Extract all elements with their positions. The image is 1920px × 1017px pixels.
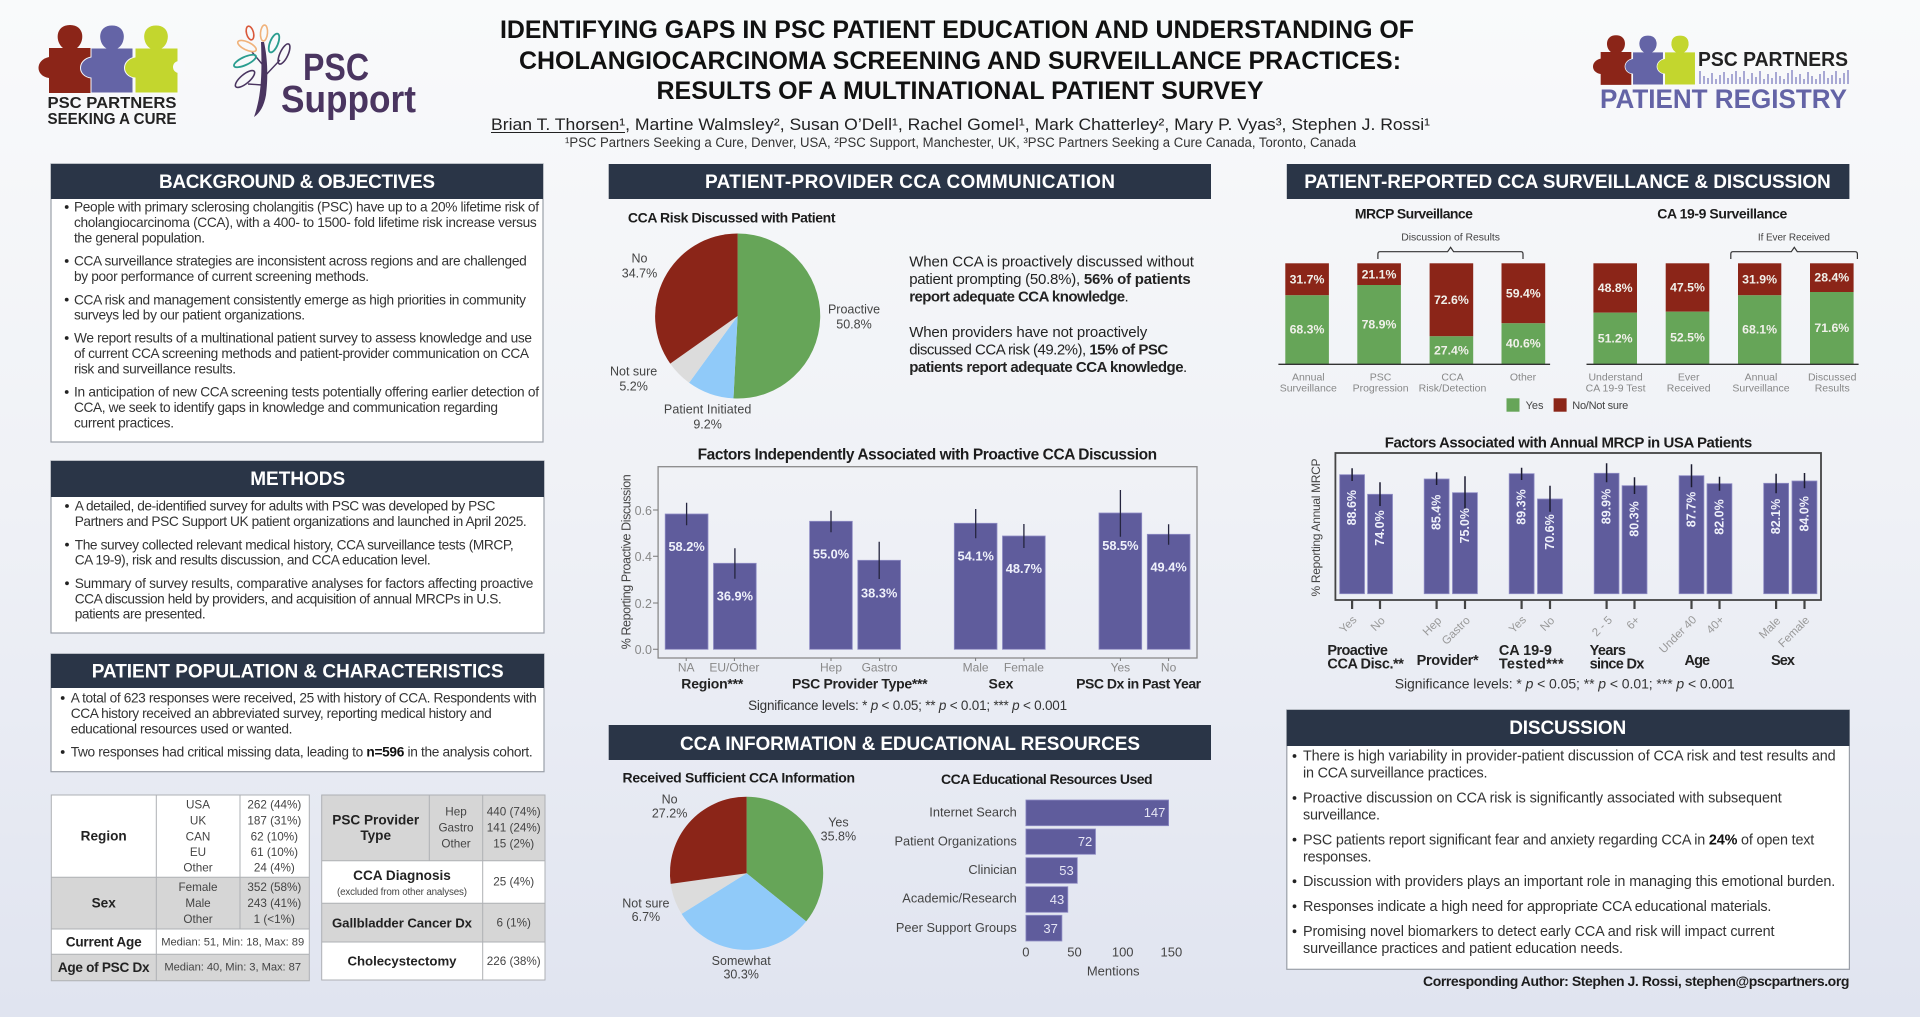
stacked bars: CA 19-9 surveillance: Discussed — [1808, 372, 1857, 384]
stacked bars: MRCP surveillance: Discussion of Results — [1401, 233, 1500, 244]
stacked bars: CA 19-9 surveillance: Ever — [1678, 372, 1700, 384]
table: demographics: EU — [190, 846, 206, 859]
logo: PSC Partners Patient Registry: PATIENT REGISTRY — [1600, 84, 1847, 114]
bullet text: patient population — [61, 691, 537, 760]
bar chart: factors associated with annual MRCP in USA patients: 6+ — [1625, 614, 1643, 632]
bullet text: methods: A detailed, de-identified survey for adults with PSC was developed by PSC — [75, 499, 496, 514]
pie chart: received sufficient CCA information — [622, 769, 856, 982]
bar chart: factors associated with proactive CCA discussion: PSC Provider Type*** — [792, 675, 928, 691]
bullet text: patient population: A total of 623 responses were received, 25 with history of CCA. Respondents with — [71, 691, 537, 706]
table: demographics: Median: 51, Min: 18, Max: 89 — [161, 936, 304, 948]
table: clinical characteristics: Other — [441, 837, 471, 850]
stacked bars: CA 19-9 surveillance — [1586, 205, 1859, 395]
bar chart: CCA educational resources used: Clinician — [968, 862, 1017, 877]
title: CHOLANGIOCARCINOMA SCREENING AND SURVEILLANCE PRACTICES: — [519, 47, 1401, 75]
pie chart: CCA risk discussed with patient: 9.2% — [693, 418, 722, 432]
table: clinical characteristics: Type — [360, 828, 391, 843]
bullet text: methods — [65, 499, 533, 621]
table: demographics: 243 (41%) — [247, 897, 301, 910]
stacked bars: CA 19-9 surveillance: 71.6% — [1814, 321, 1849, 335]
bar chart: factors associated with proactive CCA discussion: 0.2 — [635, 597, 652, 611]
stacked bars: CA 19-9 surveillance: 52.5% — [1670, 331, 1705, 345]
bar chart: CCA educational resources used — [894, 771, 1182, 979]
bullet text: methods: Summary of survey results, comparative analyses for factors affecting proactive — [75, 576, 533, 591]
bullet text: methods: The survey collected relevant medical history, CCA surveillance tests (MRCP, — [75, 537, 514, 552]
bar chart: factors associated with annual MRCP in USA patients: 75.0% — [1458, 508, 1472, 543]
table: demographics: 1 (<1%) — [254, 913, 295, 926]
callout: CCA knowledge findings: report adequate CCA knowledge. — [909, 289, 1129, 306]
table: demographics: Age of PSC Dx — [58, 960, 150, 975]
heading: discussion — [1287, 710, 1849, 746]
bar chart: factors associated with proactive CCA discussion: Yes — [1111, 661, 1130, 675]
bullet text: discussion: Proactive discussion on CCA risk is significantly associated with subsequent — [1303, 791, 1782, 807]
bullet text: background: of current CCA screening methods and patient-provider communication on CCA — [74, 346, 530, 361]
bullet text: background: risk and surveillance results. — [74, 361, 236, 376]
table: demographics: USA — [186, 798, 210, 811]
table: demographics: 61 (10%) — [251, 846, 298, 859]
stacked bars: MRCP surveillance: MRCP Surveillance — [1355, 205, 1473, 221]
panel: background and objectives — [51, 164, 543, 442]
pie chart: CCA risk discussed with patient — [610, 210, 880, 432]
stacked bars: MRCP surveillance: 40.6% — [1506, 337, 1541, 351]
pie chart: CCA risk discussed with patient: Patient Initiated — [664, 402, 751, 416]
bar chart: CCA educational resources used: 37 — [1043, 921, 1058, 936]
stacked bars: CA 19-9 surveillance: 47.5% — [1670, 280, 1705, 294]
bar chart: factors associated with annual MRCP in USA patients: 85.4% — [1430, 495, 1444, 530]
legend: yes / no or not sure: No/Not sure — [1572, 400, 1628, 412]
table: demographics: Other — [183, 862, 213, 875]
bar chart: factors associated with annual MRCP in USA patients: Provider* — [1417, 653, 1479, 669]
bar chart: factors associated with annual MRCP in USA patients: Years — [1590, 643, 1626, 659]
table: demographics: 62 (10%) — [251, 830, 298, 843]
heading: patient population — [51, 654, 544, 688]
heading: background and objectives — [51, 164, 543, 199]
bar chart: factors associated with proactive CCA discussion: 58.5% — [1102, 538, 1139, 553]
table: demographics: 262 (44%) — [247, 798, 301, 811]
bar chart: factors associated with proactive CCA discussion: Significance levels: * p < 0.05; ** p < 0.01; *** p < 0.001 — [748, 698, 1067, 713]
logo: PSC Support: PSC — [303, 47, 369, 89]
table: demographics: Region — [81, 829, 127, 844]
bar chart: CCA educational resources used: 50 — [1067, 945, 1082, 960]
pie chart: received sufficient CCA information: No — [662, 793, 678, 807]
table: clinical characteristics: Gastro — [438, 821, 474, 834]
heading: patient-reported CCA surveillance and discussion — [1287, 164, 1849, 199]
panel: methods: METHODS — [250, 469, 345, 490]
pie chart: received sufficient CCA information: 27.2% — [652, 806, 687, 820]
bar chart: factors associated with proactive CCA discussion: 54.1% — [958, 548, 994, 563]
stacked bars: CA 19-9 surveillance: 31.9% — [1742, 272, 1777, 286]
table: clinical characteristics: 6 (1%) — [496, 917, 531, 930]
authors: Brian T. Thorsen¹, Martine Walmsley², Susan O’Dell¹, Rachel Gomel¹, Mark Chatterley², Mary P. Vyas³, Stephen J. Rossi¹ — [491, 116, 1431, 134]
title — [500, 16, 1414, 105]
bar chart: CCA educational resources used: Patient Organizations — [894, 833, 1017, 848]
bar chart: CCA educational resources used: Internet Search — [929, 804, 1017, 819]
bullet text: methods: Partners and PSC Support UK patient organizations and launched in April 2025. — [75, 514, 527, 529]
bar chart: factors associated with proactive CCA discussion: Region*** — [681, 675, 744, 691]
callout: CCA knowledge findings: patient prompting (50.8%), 56% of patients — [909, 271, 1191, 288]
table: demographics: UK — [190, 814, 206, 827]
stacked bars: CA 19-9 surveillance: Understand — [1588, 372, 1643, 384]
pie chart: CCA risk discussed with patient: CCA Risk Discussed with Patient — [628, 210, 836, 226]
table: clinical characteristics: 226 (38%) — [487, 955, 541, 968]
bar chart: factors associated with proactive CCA discussion — [620, 446, 1202, 713]
pie chart: CCA risk discussed with patient: 5.2% — [619, 379, 648, 393]
heading: CCA information and educational resources: CCA INFORMATION & EDUCATIONAL RESOURCES — [680, 734, 1140, 755]
bar chart: factors associated with annual MRCP in USA patients: 82.1% — [1769, 499, 1783, 534]
bar chart: factors associated with annual MRCP in USA patients: Male — [1757, 615, 1783, 641]
stacked bars: MRCP surveillance: 59.4% — [1506, 287, 1541, 301]
table: clinical characteristics: Gallbladder Cancer Dx — [332, 915, 473, 930]
pie chart: received sufficient CCA information: 35.8% — [821, 830, 856, 844]
bullet text: background: CCA risk and management consistently emerge as high priorities in community — [74, 292, 526, 307]
bullet text: discussion: in CCA surveillance practices. — [1303, 766, 1488, 782]
pie chart: received sufficient CCA information: Received Sufficient CCA Information — [623, 769, 855, 785]
stacked bars: MRCP surveillance: Other — [1510, 372, 1537, 384]
bar chart: factors associated with annual MRCP in USA patients: 82.0% — [1712, 499, 1726, 535]
pie chart: received sufficient CCA information: Yes — [828, 816, 849, 830]
panel: background and objectives: BACKGROUND & OBJECTIVES — [159, 172, 435, 193]
bar chart: factors associated with proactive CCA discussion: Gastro — [862, 661, 898, 675]
pie chart: received sufficient CCA information: 6.7% — [632, 910, 660, 924]
heading: patient-provider CCA communication — [609, 164, 1211, 199]
bar chart: factors associated with proactive CCA discussion: PSC Dx in Past Year — [1076, 675, 1202, 691]
stacked bars: CA 19-9 surveillance: Received — [1667, 383, 1711, 395]
affiliations: ¹PSC Partners Seeking a Cure, Denver, USA, ²PSC Support, Manchester, UK, ³PSC Partners Seeking a Cure Canada, Toronto, Canada — [565, 135, 1356, 150]
bullet text: methods: patients are presented. — [75, 606, 206, 621]
stacked bars: CA 19-9 surveillance: 68.1% — [1742, 323, 1777, 337]
table: clinical characteristics: 15 (2%) — [493, 837, 534, 850]
bullet text: background: We report results of a multinational patient survey to assess knowledge and use — [74, 331, 532, 346]
bullet text: discussion — [1293, 749, 1836, 957]
table: clinical characteristics — [322, 795, 545, 980]
bar chart: factors associated with annual MRCP in USA patients: Yes — [1338, 614, 1360, 636]
logo: PSC Partners Seeking a Cure: PSC PARTNERS — [48, 95, 176, 112]
logo: PSC Partners Seeking a Cure: SEEKING A CURE — [48, 111, 176, 128]
bar chart: factors associated with annual MRCP in USA patients: Sex — [1771, 653, 1795, 669]
heading: patient-reported CCA surveillance and discussion: PATIENT-REPORTED CCA SURVEILLANCE & DISCUSSION — [1304, 172, 1831, 193]
stacked bars: CA 19-9 surveillance: 28.4% — [1814, 271, 1849, 285]
bar chart: factors associated with annual MRCP in USA patients: No — [1369, 615, 1388, 634]
table: demographics: Female — [179, 881, 217, 894]
heading: patient-provider CCA communication: PATIENT-PROVIDER CCA COMMUNICATION — [705, 172, 1115, 193]
bullet text: discussion: There is high variability in provider-patient discussion of CCA risk and test results and — [1303, 749, 1836, 765]
table: clinical characteristics: Cholecystectomy — [348, 954, 457, 969]
table: demographics: 352 (58%) — [247, 881, 301, 894]
table: clinical characteristics: 141 (24%) — [487, 821, 541, 834]
logo: PSC Partners Patient Registry: PSC PARTNERS — [1698, 49, 1848, 71]
table: demographics: 24 (4%) — [254, 862, 295, 875]
bullet text: background: CCA, we seek to identify gaps in knowledge and communication regarding — [74, 400, 498, 415]
bar chart: CCA educational resources used: Mentions — [1087, 964, 1140, 979]
bar chart: factors associated with proactive CCA discussion: 36.9% — [717, 589, 754, 604]
bullet text: discussion: responses. — [1303, 849, 1372, 865]
stacked bars: MRCP surveillance: 78.9% — [1362, 317, 1396, 331]
panel: patient population and characteristics — [51, 654, 544, 772]
table: demographics — [51, 795, 309, 981]
stacked bars: CA 19-9 surveillance: Results — [1815, 383, 1850, 395]
logo: PSC Partners Patient Registry — [1593, 35, 1848, 114]
stacked bars: MRCP surveillance: Risk/Detection — [1419, 383, 1486, 395]
callout: CCA knowledge findings: When CCA is proactively discussed without — [909, 253, 1195, 270]
stacked bars: CA 19-9 surveillance: If Ever Received — [1758, 233, 1830, 244]
bar chart: factors associated with annual MRCP in USA patients: 89.9% — [1600, 489, 1614, 524]
corresponding author: Corresponding Author: Stephen J. Rossi, stephen@pscpartners.org — [1423, 973, 1849, 989]
bar chart: CCA educational resources used: 0 — [1022, 945, 1030, 960]
bar chart: factors associated with proactive CCA discussion: % Reporting Proactive Discussion — [620, 474, 634, 649]
callout: CCA knowledge findings — [909, 253, 1195, 376]
pie chart: received sufficient CCA information: Somewhat — [712, 954, 771, 968]
bar chart: factors associated with annual MRCP in USA patients: Hep — [1421, 615, 1444, 638]
stacked bars: CA 19-9 surveillance: Annual — [1745, 372, 1777, 384]
callout: CCA knowledge findings: When providers have not proactively — [909, 324, 1148, 341]
bullet text: discussion: surveillance. — [1303, 807, 1380, 823]
bullet text: discussion: Promising novel biomarkers to detect early CCA and risk will impact current — [1303, 924, 1774, 940]
bar chart: factors associated with proactive CCA discussion: Female — [1004, 661, 1044, 675]
panel: discussion — [1287, 710, 1849, 969]
bullet text: background: CCA surveillance strategies are inconsistent across regions and are challenged — [74, 254, 527, 269]
stacked bars: MRCP surveillance: Annual — [1292, 372, 1325, 384]
table: demographics: 187 (31%) — [247, 814, 301, 827]
bar chart: factors associated with annual MRCP in USA patients: 74.0% — [1373, 510, 1387, 546]
heading: methods — [51, 461, 544, 497]
heading: CCA information and educational resources — [609, 725, 1211, 760]
bar chart: CCA educational resources used: 43 — [1050, 892, 1064, 907]
bar chart: factors associated with annual MRCP in USA patients — [1309, 434, 1821, 691]
stacked bars: MRCP surveillance — [1278, 205, 1550, 395]
bar chart: factors associated with proactive CCA discussion: 38.3% — [861, 585, 898, 600]
bullet text: background: In anticipation of new CCA screening tests potentially offering earlier detection of — [74, 385, 539, 400]
table: demographics: Male — [185, 897, 211, 910]
bar chart: factors associated with annual MRCP in USA patients: Proactive — [1327, 643, 1388, 659]
bar chart: factors associated with proactive CCA discussion: 58.2% — [668, 539, 705, 554]
bar chart: factors associated with annual MRCP in USA patients: 2 - 5 — [1590, 614, 1615, 639]
table: clinical characteristics: 25 (4%) — [493, 876, 534, 889]
bar chart: factors associated with annual MRCP in USA patients: 70.6% — [1543, 514, 1557, 550]
stacked bars: MRCP surveillance: 31.7% — [1290, 273, 1324, 287]
stacked bars: MRCP surveillance: 27.4% — [1434, 344, 1469, 358]
bullet text: background: surveys led by our patient organizations. — [74, 308, 305, 323]
bar chart: factors associated with proactive CCA discussion: Male — [963, 661, 989, 675]
bar chart: CCA educational resources used: 100 — [1112, 945, 1134, 960]
pie chart: CCA risk discussed with patient: 50.8% — [836, 317, 872, 331]
bar chart: factors associated with proactive CCA discussion: EU/Other — [709, 661, 759, 675]
bar chart: CCA educational resources used: 72 — [1078, 834, 1092, 849]
bar chart: factors associated with annual MRCP in USA patients: Age — [1684, 653, 1710, 669]
legend: yes / no or not sure: Yes — [1526, 400, 1544, 412]
bullet text: background: by poor performance of current screening methods. — [74, 269, 369, 284]
bar chart: CCA educational resources used: 147 — [1144, 805, 1165, 820]
bullet text: background: cholangiocarcinoma (CCA), with a 400- to 1500- fold lifetime risk increase versus — [74, 215, 537, 230]
bar chart: CCA educational resources used: 53 — [1059, 863, 1074, 878]
stacked bars: CA 19-9 surveillance: 51.2% — [1598, 331, 1633, 345]
bar chart: factors associated with annual MRCP in USA patients: Female — [1776, 614, 1812, 650]
bar chart: factors associated with annual MRCP in USA patients: Tested*** — [1499, 656, 1564, 672]
stacked bars: MRCP surveillance: 68.3% — [1290, 323, 1324, 337]
callout: CCA knowledge findings: patients report adequate CCA knowledge. — [909, 359, 1187, 376]
table: clinical characteristics: CCA Diagnosis — [353, 868, 451, 883]
bullet text: discussion: Discussion with providers plays an important role in managing this emotional burden. — [1303, 874, 1835, 890]
bullet text: discussion: Responses indicate a high need for appropriate CCA educational materials. — [1303, 899, 1771, 915]
stacked bars: CA 19-9 surveillance: Surveillance — [1732, 383, 1790, 395]
stacked bars: MRCP surveillance: 72.6% — [1434, 293, 1469, 307]
table: demographics: Median: 40, Min: 3, Max: 87 — [164, 962, 301, 974]
bar chart: factors associated with annual MRCP in USA patients: 80.3% — [1628, 501, 1642, 537]
bar chart: factors associated with proactive CCA discussion: NA — [678, 661, 695, 675]
pie chart: CCA risk discussed with patient: No — [632, 251, 648, 265]
table: clinical characteristics: Hep — [445, 805, 467, 818]
bullet text: methods: CA 19-9), risk and results discussion, and CCA education level. — [75, 553, 431, 568]
bullet text: background — [65, 200, 539, 430]
bar chart: CCA educational resources used: 150 — [1161, 945, 1182, 960]
table: clinical characteristics: 440 (74%) — [487, 805, 541, 818]
pie chart: received sufficient CCA information: 30.3% — [723, 968, 759, 982]
bar chart: factors associated with annual MRCP in USA patients: 40+ — [1705, 614, 1727, 636]
legend: yes / no or not sure — [1506, 398, 1628, 412]
table: clinical characteristics: (excluded from other analyses) — [337, 887, 467, 898]
bullet text: background: current practices. — [74, 415, 174, 430]
bar chart: factors associated with annual MRCP in USA patients: Significance levels: * p < 0.05; ** p < 0.01; *** p < 0.001 — [1395, 675, 1735, 691]
pie chart: CCA risk discussed with patient: Proactive — [828, 302, 880, 316]
stacked bars: MRCP surveillance: Surveillance — [1280, 383, 1337, 395]
bar chart: factors associated with proactive CCA discussion: 0.0 — [635, 643, 652, 657]
bullet text: discussion: PSC patients report significant fear and anxiety regarding CCA in 24% of open text — [1303, 832, 1814, 848]
bar chart: factors associated with annual MRCP in USA patients: No — [1538, 615, 1557, 634]
stacked bars: MRCP surveillance: CCA — [1441, 372, 1464, 384]
bar chart: factors associated with proactive CCA discussion: 0.6 — [635, 504, 652, 518]
bullet text: background: People with primary sclerosing cholangitis (PSC) have up to a 20% lifetime risk of — [74, 200, 539, 215]
title: RESULTS OF A MULTINATIONAL PATIENT SURVEY — [656, 77, 1264, 105]
bar chart: factors associated with annual MRCP in USA patients: 87.7% — [1684, 492, 1698, 527]
bar chart: factors associated with annual MRCP in USA patients: Factors Associated with Annual MRCP in USA Patients — [1385, 434, 1752, 451]
bar chart: factors associated with annual MRCP in USA patients: CCA Disc.** — [1327, 656, 1404, 672]
table: clinical characteristics: PSC Provider — [332, 812, 420, 827]
bar chart: factors associated with annual MRCP in USA patients: Under 40 — [1657, 614, 1699, 656]
panel: patient population and characteristics: PATIENT POPULATION & CHARACTERISTICS — [92, 662, 504, 683]
logo: PSC Partners Seeking a Cure — [38, 25, 185, 128]
bar chart: factors associated with annual MRCP in USA patients: 88.6% — [1345, 490, 1359, 525]
stacked bars: CA 19-9 surveillance: CA 19-9 Surveillance — [1657, 205, 1788, 221]
table: demographics: Current Age — [66, 935, 142, 950]
bar chart: CCA educational resources used: CCA Educational Resources Used — [941, 771, 1153, 787]
bar chart: CCA educational resources used: Academic/Research — [902, 891, 1017, 906]
bar chart: factors associated with proactive CCA discussion: Sex — [989, 675, 1014, 691]
logo: PSC Support — [232, 25, 416, 121]
pie chart: CCA risk discussed with patient: Not sure — [610, 364, 657, 378]
bar chart: factors associated with proactive CCA discussion: Factors Independently Associated with Proactive CCA Discussion — [698, 446, 1157, 463]
bar chart: factors associated with annual MRCP in USA patients: 89.3% — [1515, 489, 1529, 525]
bar chart: factors associated with annual MRCP in USA patients: 84.0% — [1798, 496, 1812, 532]
stacked bars: MRCP surveillance: 21.1% — [1362, 267, 1396, 281]
table: demographics: Sex — [92, 896, 116, 911]
bar chart: factors associated with proactive CCA discussion: 55.0% — [813, 546, 850, 561]
bullet text: patient population: CCA history received an abbreviated survey, reporting medical history and — [71, 706, 492, 721]
bullet text: methods: CCA discussion held by providers, and acquisition of annual MRCPs in U.S. — [75, 591, 502, 606]
table: demographics: Other — [183, 913, 213, 926]
bar chart: CCA educational resources used: Peer Support Groups — [896, 920, 1017, 935]
stacked bars: CA 19-9 surveillance: 48.8% — [1598, 281, 1633, 295]
logo: PSC Support: Support — [281, 79, 416, 121]
bar chart: factors associated with annual MRCP in USA patients: % Reporting Annual MRCP — [1309, 458, 1323, 596]
bar chart: factors associated with proactive CCA discussion: 0.4 — [635, 550, 652, 564]
bullet text: patient population: educational resources used or wanted. — [71, 721, 292, 736]
stacked bars: CA 19-9 surveillance: CA 19-9 Test — [1586, 383, 1646, 395]
bar chart: factors associated with annual MRCP in USA patients: CA 19-9 — [1499, 643, 1552, 659]
callout: CCA knowledge findings: discussed CCA risk (49.2%), 15% of PSC — [909, 342, 1168, 359]
stacked bars: MRCP surveillance: Progression — [1353, 383, 1409, 395]
bar chart: factors associated with annual MRCP in USA patients: Gastro — [1440, 615, 1473, 647]
bar chart: factors associated with proactive CCA discussion: Hep — [820, 661, 842, 675]
title: IDENTIFYING GAPS IN PSC PATIENT EDUCATION AND UNDERSTANDING OF — [500, 16, 1414, 44]
bar chart: factors associated with annual MRCP in USA patients: Yes — [1507, 614, 1529, 636]
bar chart: factors associated with proactive CCA discussion: 48.7% — [1006, 561, 1043, 576]
bar chart: factors associated with proactive CCA discussion: No — [1161, 661, 1177, 675]
table: demographics: CAN — [186, 830, 210, 843]
pie chart: received sufficient CCA information: Not sure — [622, 896, 670, 910]
pie chart: CCA risk discussed with patient: 34.7% — [622, 267, 657, 281]
bar chart: factors associated with annual MRCP in USA patients: since Dx — [1590, 656, 1644, 672]
bar chart: factors associated with proactive CCA discussion: 49.4% — [1150, 559, 1187, 574]
bullet text: patient population: Two responses had critical missing data, leading to n=596 in the analysis cohort. — [71, 745, 533, 760]
stacked bars: MRCP surveillance: PSC — [1370, 372, 1392, 384]
bullet text: background: the general population. — [74, 230, 205, 245]
panel: discussion: DISCUSSION — [1509, 718, 1626, 739]
bullet text: discussion: surveillance practices and patient education needs. — [1303, 941, 1623, 957]
panel: methods — [51, 461, 544, 633]
